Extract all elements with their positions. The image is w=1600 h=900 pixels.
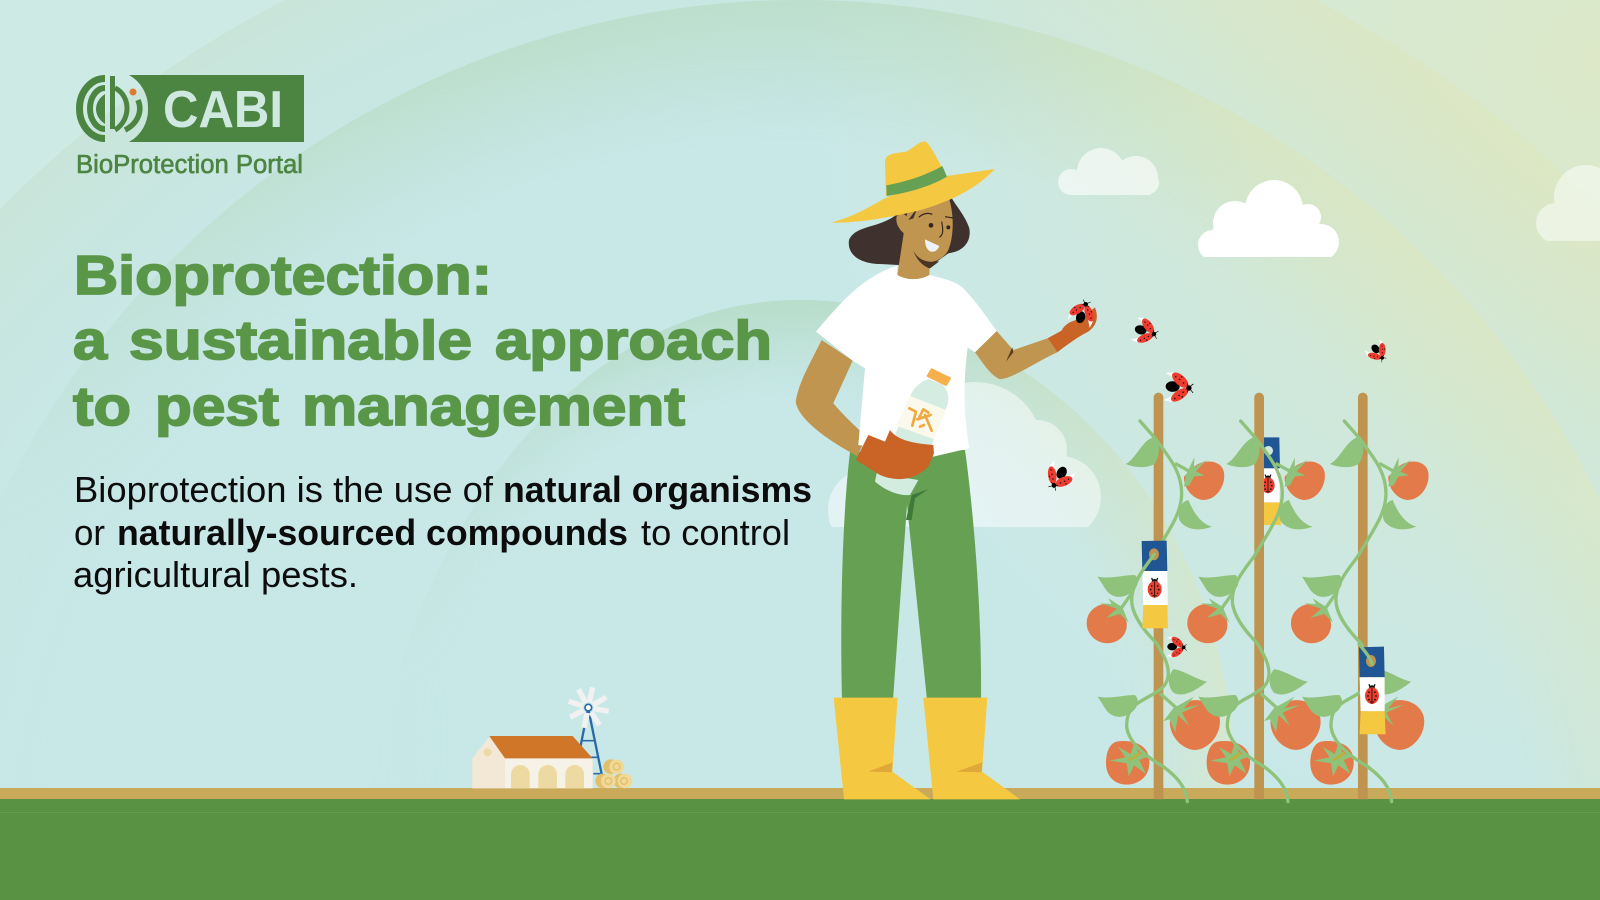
windmill <box>568 687 609 774</box>
plant 3 <box>1291 393 1429 802</box>
cloud: behind farmer <box>828 382 1101 527</box>
ladybird 3 <box>1163 369 1194 405</box>
logo: CABI wordmark: CABI <box>163 81 283 139</box>
cloud: large white <box>1198 180 1339 260</box>
neck and face <box>896 197 953 279</box>
title: pest <box>155 375 279 437</box>
description text: or <box>74 512 105 553</box>
plant 1 <box>1087 393 1224 802</box>
ladybird among plants <box>1166 635 1187 659</box>
title <box>73 244 772 437</box>
right arm <box>975 331 1057 379</box>
barn <box>472 736 593 788</box>
title: a <box>73 309 107 371</box>
description text: to control <box>641 512 790 553</box>
upper body <box>796 141 1097 520</box>
face details <box>908 207 953 268</box>
boots <box>834 698 1020 799</box>
ladybird 5 <box>1039 458 1079 496</box>
farmhouse with windmill and hay <box>472 687 632 788</box>
tag on left plant <box>1132 541 1168 628</box>
description text <box>73 469 812 595</box>
title: sustainable <box>129 309 472 371</box>
plant 2 <box>1187 393 1325 802</box>
tag behind middle plant <box>1261 437 1281 525</box>
ladybird on glove <box>1065 296 1100 329</box>
ground <box>0 788 1600 900</box>
cloud: right edge <box>1536 165 1600 243</box>
title: approach <box>495 309 772 371</box>
tomato plants <box>1087 393 1429 802</box>
logo <box>76 75 304 179</box>
title: to <box>73 375 131 437</box>
title: management <box>302 375 685 437</box>
tag on right plant <box>1359 644 1386 734</box>
ladybirds in flight <box>1039 296 1393 496</box>
hay bales <box>595 759 632 788</box>
title: Bioprotection: <box>74 244 492 306</box>
ladybird 2 <box>1130 314 1161 349</box>
description text: Bioprotection is the use of <box>74 469 494 510</box>
right glove <box>1048 307 1097 352</box>
bottle <box>875 369 950 495</box>
left glove <box>856 430 934 479</box>
left arm <box>796 340 867 456</box>
logo: portal name: BioProtection Portal <box>76 151 303 179</box>
description text: naturally-sourced compounds <box>117 512 628 553</box>
hair <box>849 195 970 267</box>
cloud: small faded top <box>1058 148 1159 200</box>
ladybird 4 <box>1363 337 1393 367</box>
trouser crease <box>906 489 928 520</box>
farmer <box>796 141 1097 799</box>
trousers <box>841 450 981 700</box>
description text: natural organisms <box>503 469 812 510</box>
hat <box>831 141 995 223</box>
t-shirt <box>816 266 997 457</box>
logo: CABI roundel <box>80 76 140 138</box>
description text: agricultural pests. <box>73 554 358 595</box>
logo: green banner <box>129 75 304 142</box>
